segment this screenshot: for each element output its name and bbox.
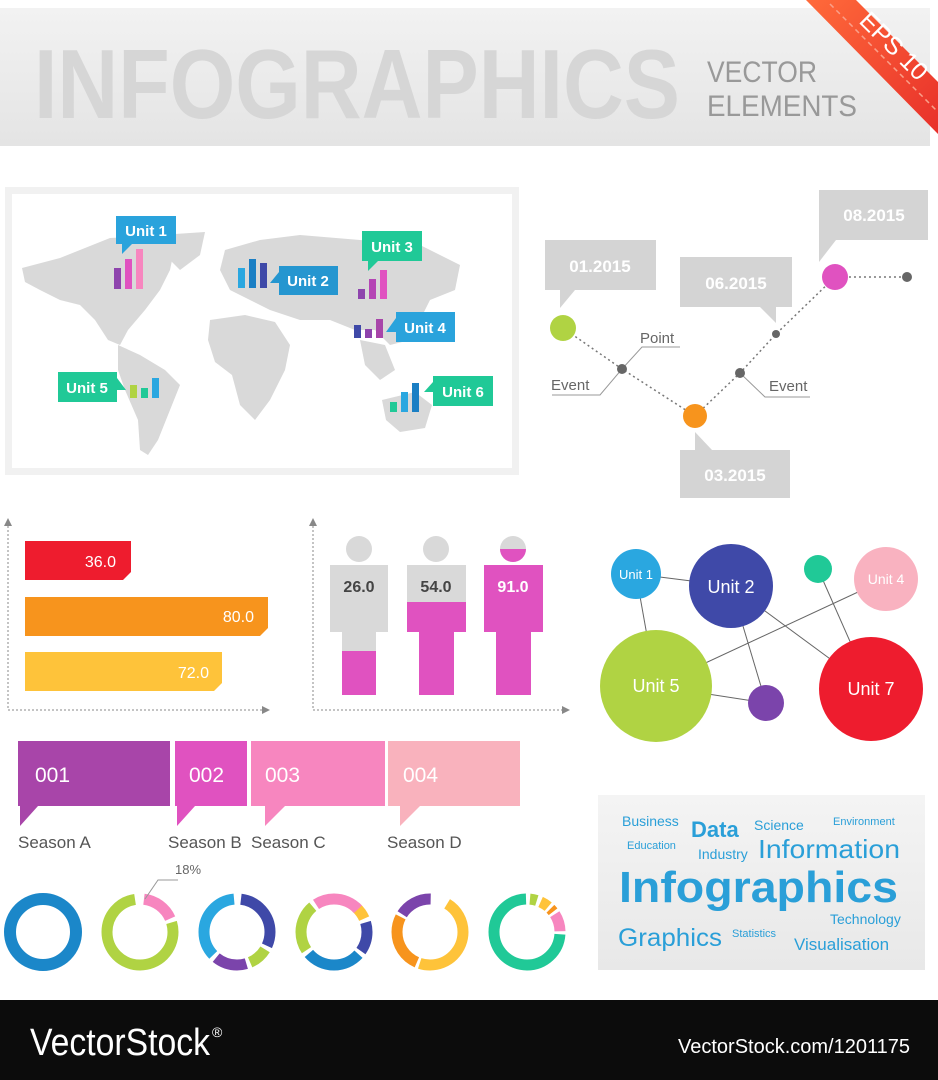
callout: Unit 6: Unit 6 (442, 384, 484, 401)
network diagram: Unit 1 (619, 567, 653, 582)
title: INFOGRAPHICS (34, 29, 680, 139)
season labels: 004 (403, 764, 438, 787)
network diagram: Unit 4 (868, 571, 904, 587)
callout: Unit 3 (358, 231, 422, 299)
word cloud panel: Visualisation (794, 935, 889, 954)
word cloud panel: Industry (698, 846, 748, 862)
bar chart: 72.0 (178, 665, 209, 682)
bar chart: 36.0 (85, 554, 116, 571)
panel: world map (5, 187, 519, 475)
timeline chart: Event (769, 378, 808, 395)
word cloud panel: Information (758, 834, 900, 864)
word cloud panel: Education (627, 840, 676, 852)
timeline chart: Event (551, 377, 590, 394)
callout: Unit 4: Unit 4 (404, 320, 446, 337)
people chart (309, 518, 570, 714)
callout: Unit 2: Unit 2 (287, 273, 329, 290)
figure 91.0: 91.0 (497, 579, 529, 596)
callout: 06.2015: 06.2015 (705, 274, 767, 293)
timeline chart: Point (640, 330, 675, 347)
bar chart (4, 518, 270, 714)
network diagram: Unit 2 (707, 577, 755, 597)
season labels (18, 741, 520, 852)
ribbon: EPS 10: EPS 10 (854, 6, 934, 86)
callout: 01.2015: 01.2015 (569, 257, 631, 276)
callout: Unit 2 (238, 259, 338, 295)
word cloud panel: Statistics (732, 928, 777, 940)
subtitle: VECTOR (707, 56, 817, 89)
subtitle: ELEMENTS (707, 90, 857, 123)
header banner (0, 8, 930, 146)
callout: 06.2015 (680, 257, 792, 323)
season labels: 001 (35, 764, 70, 787)
callout: Unit 1: Unit 1 (125, 223, 167, 240)
figure 91.0 (484, 536, 543, 695)
network diagram: Unit 7 (847, 679, 895, 699)
bar chart: 80.0 (223, 609, 254, 626)
callout: Unit 4 (354, 312, 455, 342)
callout: Unit 5: Unit 5 (66, 380, 108, 397)
subtitle (707, 56, 857, 123)
callout: Unit 5 (58, 372, 159, 402)
callout: 01.2015 (545, 240, 656, 308)
callout: 08.2015: 08.2015 (843, 206, 905, 225)
word cloud panel: Graphics (618, 924, 722, 952)
callout: Unit 1 (114, 216, 176, 289)
season labels: 002 (189, 764, 224, 787)
season labels: Season B (168, 833, 242, 852)
figure 54.0: 54.0 (420, 579, 452, 596)
word cloud panel: Data (691, 817, 739, 842)
timeline chart (545, 190, 928, 498)
footer: VectorStock (30, 1022, 211, 1064)
callout: 08.2015 (819, 190, 928, 262)
figure 26.0: 26.0 (343, 579, 375, 596)
season labels: Season A (18, 833, 91, 852)
donut charts: 18% (175, 862, 201, 877)
word cloud panel: Infographics (619, 863, 898, 912)
footer (0, 1000, 938, 1080)
word cloud panel: Science (754, 817, 804, 833)
footer: VectorStock.com/1201175 (678, 1036, 910, 1058)
donut charts (10, 862, 560, 965)
season labels: Season D (387, 833, 462, 852)
figure 54.0 (407, 536, 466, 695)
season labels: Season C (251, 833, 326, 852)
world map shapes (22, 232, 460, 455)
word cloud panel: Business (622, 813, 679, 829)
network diagram: Unit 5 (632, 676, 680, 696)
callout: Unit 3: Unit 3 (371, 239, 413, 256)
callout: 03.2015: 03.2015 (704, 466, 766, 485)
callout: Unit 6 (390, 376, 493, 412)
ribbon: EPS 10 (806, 0, 938, 134)
word cloud panel: Environment (833, 816, 895, 828)
word cloud panel: Technology (830, 911, 901, 927)
figure 26.0 (330, 536, 388, 695)
word cloud panel (598, 795, 925, 970)
footer: ® (212, 1024, 223, 1040)
callout: 03.2015 (680, 432, 790, 498)
season labels: 003 (265, 764, 300, 787)
network diagram (600, 544, 923, 742)
